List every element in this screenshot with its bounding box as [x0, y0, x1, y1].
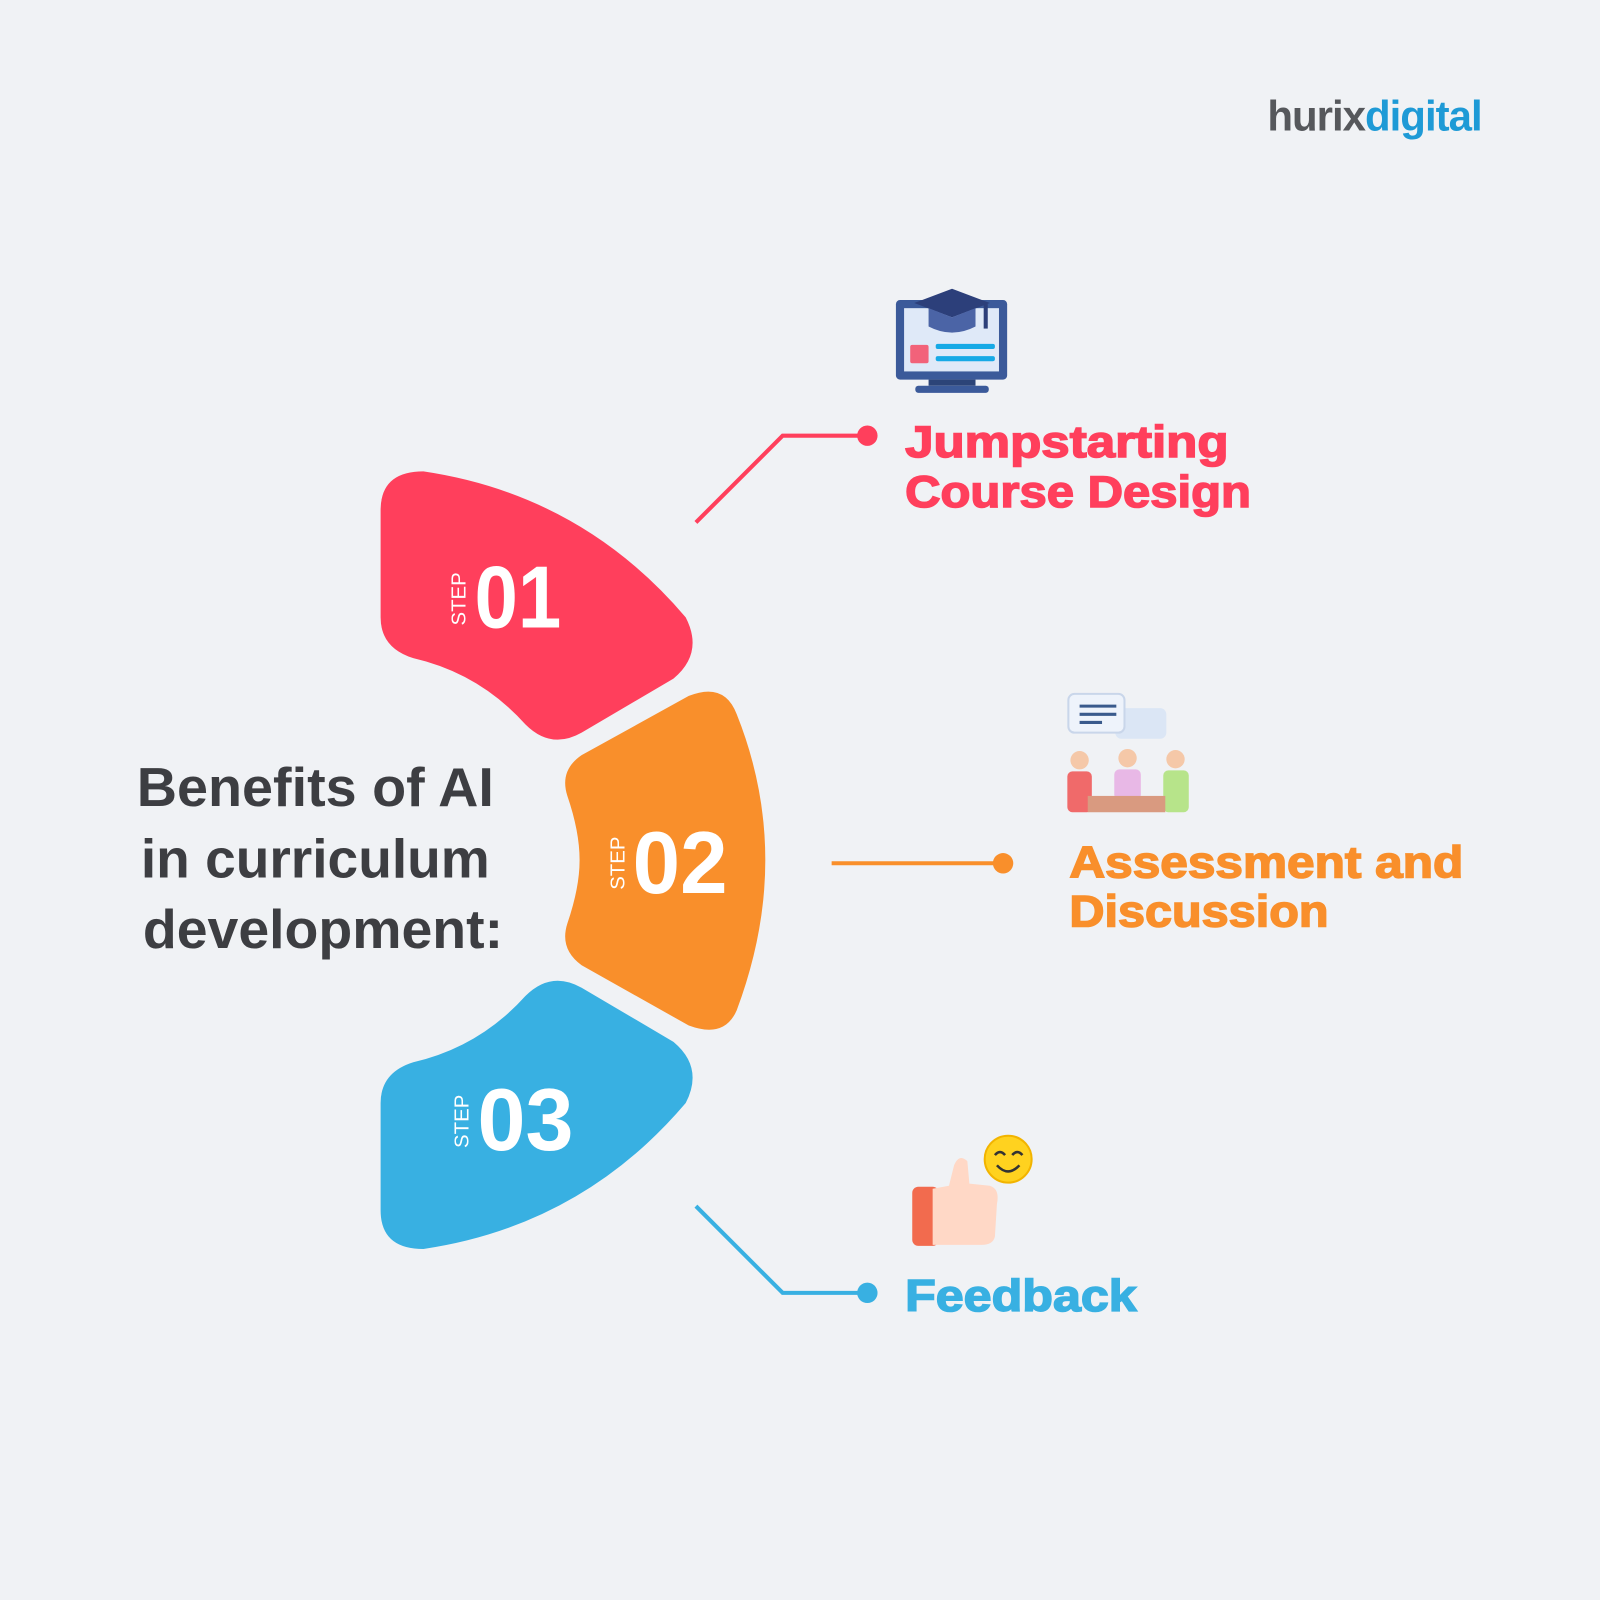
segment: step 03: [381, 981, 693, 1249]
connector: step 03: [696, 1206, 878, 1303]
segment: step 01: STEP: [448, 572, 470, 626]
label: Assessment and Discussion: Discussion: [1069, 886, 1329, 937]
label: Feedback: Feedback: [905, 1270, 1137, 1321]
segment: step 03: 03: [478, 1071, 573, 1169]
segment: step 01: 01: [474, 549, 561, 647]
icon: discussion group: [1067, 694, 1189, 812]
segment: step 02: STEP: [607, 837, 629, 890]
icon: monitor with graduation cap: [896, 289, 1007, 393]
label: Jumpstarting Course Design: Course Design: [905, 466, 1251, 517]
segment: step 01: [381, 471, 693, 740]
label: Assessment and Discussion: Assessment and: [1069, 837, 1463, 888]
icon: thumbs up with smiley: [912, 1136, 1032, 1246]
label: Jumpstarting Course Design: [905, 416, 1251, 517]
label: Assessment and Discussion: [1069, 837, 1463, 937]
segment: step 02: 02: [633, 814, 728, 912]
title: in curriculum: [141, 828, 490, 890]
segment: step 02: [565, 692, 765, 1030]
connector: step 01: [696, 426, 878, 522]
connector: step 02: [832, 853, 1013, 873]
segment: step 03: STEP: [451, 1095, 473, 1148]
title: [137, 756, 503, 960]
title: Benefits of AI: [137, 756, 494, 818]
label: Jumpstarting Course Design: Jumpstarting: [905, 416, 1229, 467]
title: development:: [143, 898, 503, 960]
logo: hurixdigital: [1267, 93, 1482, 141]
